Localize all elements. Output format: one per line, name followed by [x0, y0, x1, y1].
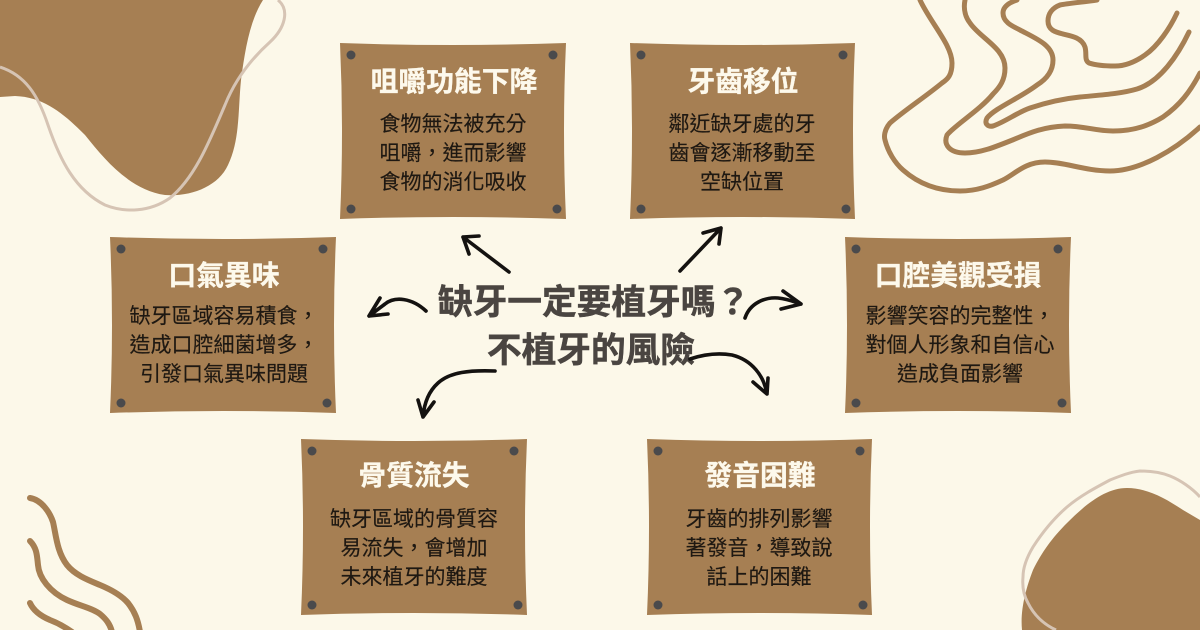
panel: bone loss [301, 439, 527, 615]
panel: speech difficulty: 牙齒的排列影響 [686, 508, 832, 531]
panel: speech difficulty: 話上的困難 [706, 566, 812, 589]
panel: bad breath [110, 237, 336, 413]
arrow: to chewing panel [463, 236, 509, 272]
decoration: top-left blob and outline [0, 0, 285, 210]
panel: bone loss: 缺牙區域的骨質容 [330, 508, 498, 531]
panel: speech difficulty: 發音困難 [704, 460, 816, 491]
panel: tooth shifting: 鄰近缺牙處的牙 [668, 113, 816, 136]
panel: bad breath: 引發口氣異味問題 [140, 363, 308, 386]
panel: oral aesthetics: 對個人形象和自信心 [866, 334, 1054, 357]
panel: tooth shifting: 齒會逐漸移動至 [668, 142, 816, 165]
panel: chewing function decline [340, 43, 566, 219]
panel: bad breath: 缺牙區域容易積食， [130, 305, 318, 328]
panel: chewing function decline: 食物無法被充分 [380, 113, 526, 136]
title: 缺牙一定要植牙嗎？ [438, 283, 750, 322]
panel: speech difficulty: 著發音，導致說 [686, 537, 832, 560]
panel: oral aesthetics: 口腔美觀受損 [875, 260, 1042, 291]
panel: tooth shifting: 牙齒移位 [687, 66, 799, 97]
panel: oral aesthetics [845, 237, 1071, 413]
panel: speech difficulty [647, 439, 872, 615]
panel: bone loss: 骨質流失 [358, 460, 470, 491]
panel: tooth shifting [630, 43, 855, 219]
decoration: top-right contour lines [885, 0, 1200, 191]
panel: chewing function decline: 咀嚼，進而影響 [380, 142, 526, 165]
panel: oral aesthetics: 影響笑容的完整性， [866, 305, 1054, 328]
panel: bone loss: 易流失，會增加 [340, 537, 488, 560]
decoration: bottom-right blob and outline [1022, 471, 1200, 630]
decoration: bottom-left wavy lines [30, 498, 140, 630]
panel: oral aesthetics: 造成負面影響 [897, 363, 1023, 386]
panel: chewing function decline: 咀嚼功能下降 [371, 66, 538, 97]
title: 不植牙的風險 [487, 331, 695, 370]
arrow: to bone loss panel [418, 371, 495, 417]
panel: bad breath: 口氣異味 [168, 260, 280, 291]
panel: tooth shifting: 空缺位置 [700, 171, 784, 194]
panel: chewing function decline: 食物的消化吸收 [380, 171, 526, 194]
panel: bone loss: 未來植牙的難度 [340, 566, 488, 589]
arrow: to bad breath panel [369, 298, 426, 316]
arrow: to speech difficulty panel [690, 354, 768, 394]
arrow: to oral aesthetics panel [745, 291, 801, 318]
title [438, 283, 750, 370]
arrow: to tooth shifting panel [680, 228, 721, 271]
panel: bad breath: 造成口腔細菌增多， [130, 334, 318, 357]
